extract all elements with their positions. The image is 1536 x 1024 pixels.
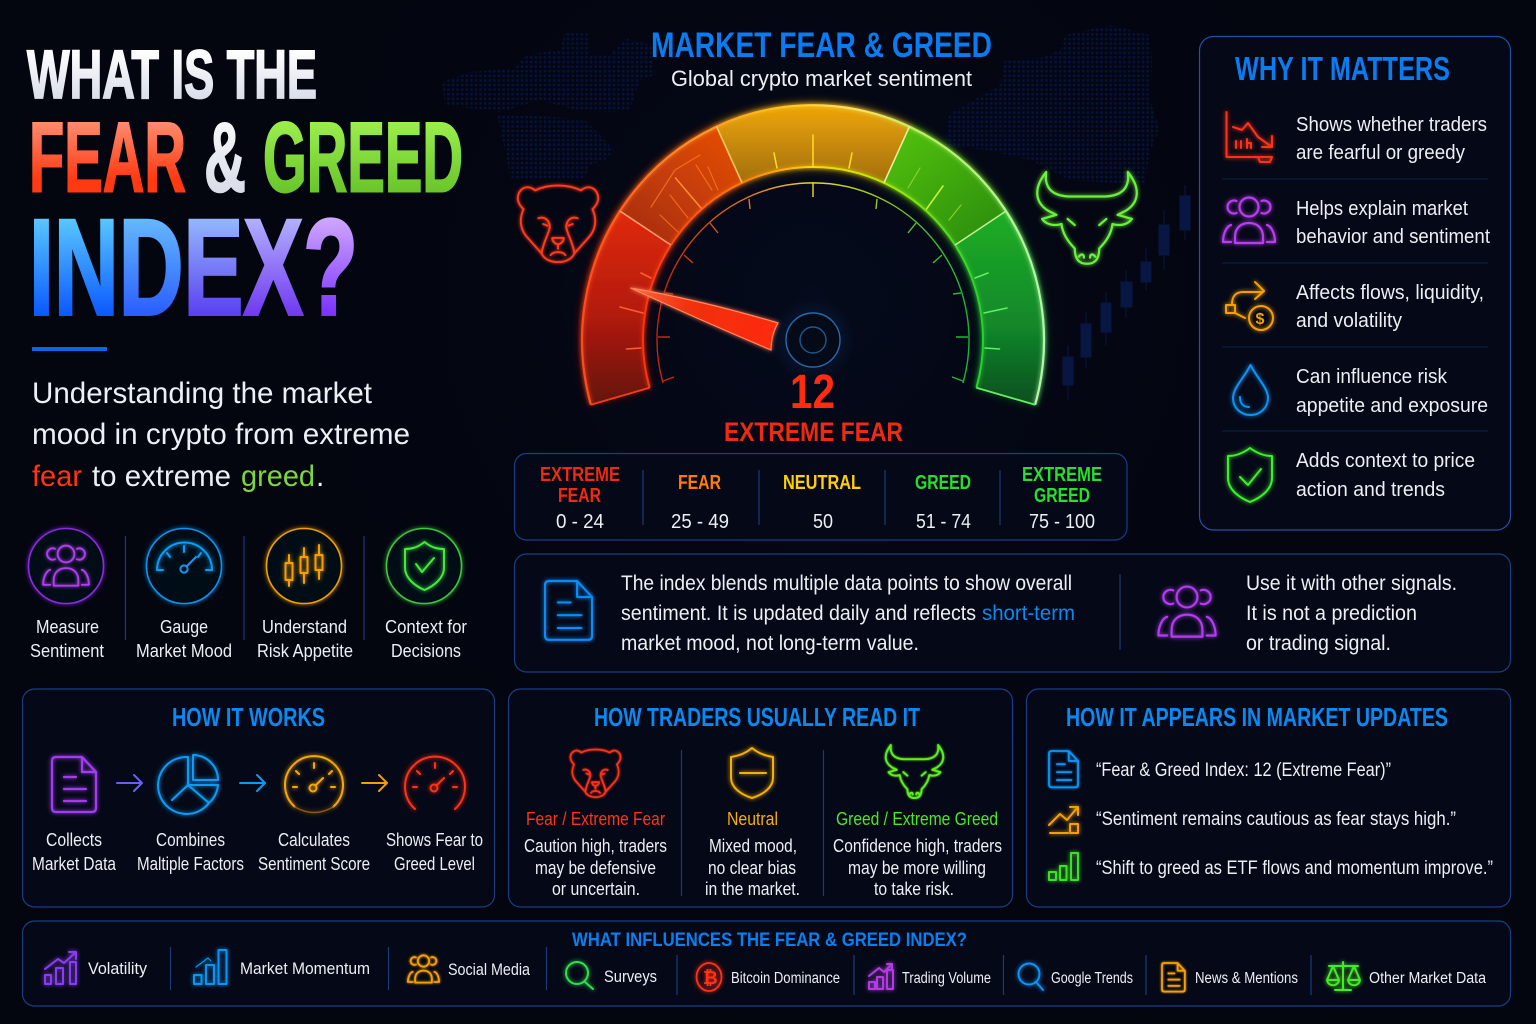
panel: explanation: market mood, not long-term value.: [621, 632, 919, 655]
panel: influences: Market Momentum: [240, 959, 370, 978]
panel: explanation: [514, 554, 1510, 672]
panel: explanation: It is not a prediction: [1246, 602, 1417, 625]
arrow: step one: [117, 775, 142, 791]
panel: influences: Bitcoin Dominance: [731, 970, 840, 987]
panel: sentiment ranges: GREED: [915, 472, 971, 494]
icon: google trends: [1018, 964, 1043, 990]
panel: how it works: Sentiment Score: [258, 853, 370, 874]
panel: influences: Google Trends: [1051, 970, 1133, 987]
panel: how it works: [22, 689, 494, 907]
panel: how traders read it: may be more willing: [848, 858, 986, 878]
icon: bull: [1037, 172, 1137, 264]
icon: document: [52, 757, 96, 812]
feature: measure sentiment: Measure: [36, 616, 99, 637]
feature: measure sentiment: [28, 528, 104, 661]
panel: influences: WHAT INFLUENCES THE FEAR & GREED INDEX?: [572, 930, 967, 951]
icon: people: [1223, 198, 1275, 243]
panel: how traders read it: may be defensive: [535, 858, 656, 878]
subtitle: Understanding the market: [32, 377, 373, 410]
panel: sentiment ranges: 50: [813, 511, 833, 533]
panel: explanation: The index blends multiple data points to show overall: [621, 572, 1072, 595]
feature: context for decisions: Decisions: [391, 640, 461, 661]
world map dot background: [442, 25, 1160, 185]
icon: news: [1162, 963, 1185, 992]
central heading: [651, 26, 992, 91]
icon: doc small: [1049, 751, 1078, 787]
panel: how traders read it: Greed / Extreme Greed: [836, 809, 998, 829]
panel: market updates: “Fear & Greed Index: 12 (Extreme Fear)”: [1096, 760, 1391, 781]
arrow: step three: [362, 775, 387, 791]
title: &: [204, 102, 246, 212]
panel: sentiment ranges: 0 - 24: [556, 511, 604, 533]
panel: sentiment ranges: [514, 454, 1127, 540]
candlestick background: [1063, 185, 1190, 400]
panel: why it matters: Shows whether traders: [1296, 113, 1487, 136]
feature: understand risk appetite: [257, 528, 353, 661]
icon: bitcoin: [696, 963, 722, 991]
panel: influences: Trading Volume: [902, 970, 991, 987]
panel: influences: Volatility: [88, 959, 147, 978]
icon: rising chart: [1049, 807, 1078, 833]
title: FEAR: [29, 102, 186, 212]
panel: sentiment ranges: EXTREME: [1022, 464, 1102, 486]
icon: social media: [408, 955, 439, 983]
panel: how it works: Calculates: [278, 829, 350, 850]
title accent rule: [32, 347, 107, 351]
panel: how it works: Shows Fear to: [386, 829, 483, 850]
panel: sentiment ranges: 25 - 49: [671, 511, 729, 533]
panel: how traders read it: no clear bias: [708, 858, 796, 878]
icon: water drop: [1233, 365, 1268, 415]
icon: bull small: [886, 745, 943, 798]
subtitle: mood in crypto from extreme: [32, 418, 410, 451]
title: WHAT IS THE: [27, 36, 317, 113]
icon: bitcoin: ₿: [703, 968, 718, 989]
icon: scales: [1327, 962, 1360, 990]
panel: why it matters: action and trends: [1296, 478, 1445, 501]
feature: measure sentiment: Sentiment: [30, 640, 104, 661]
panel: why it matters: Helps explain market: [1296, 197, 1468, 220]
gauge value: [724, 366, 903, 447]
panel: influences: [22, 921, 1510, 1006]
subtitle: to extreme: [92, 460, 231, 493]
panel: how traders read it: [508, 689, 1012, 907]
subtitle: fear: [32, 460, 82, 493]
icon: bear: [518, 185, 598, 262]
panel: how traders read it: HOW TRADERS USUALLY READ IT: [594, 702, 920, 732]
panel: influences: Other Market Data: [1369, 970, 1486, 987]
panel: why it matters: [1200, 36, 1510, 530]
panel: how traders read it: in the market.: [705, 879, 800, 899]
panel: influences: Social Media: [448, 960, 530, 979]
icon: falling chart: [1226, 112, 1272, 162]
panel: why it matters: Can influence risk: [1296, 365, 1448, 388]
subtitle: .: [316, 460, 324, 493]
panel: why it matters: WHY IT MATTERS: [1235, 50, 1450, 87]
icon: bear small: [570, 750, 621, 797]
panel: explanation: or trading signal.: [1246, 632, 1391, 655]
feature: context for decisions: [385, 528, 467, 661]
panel: influences: News & Mentions: [1195, 970, 1298, 987]
panel: how traders read it: Caution high, traders: [524, 836, 667, 856]
panel: how it works: Collects: [46, 829, 102, 850]
panel: explanation: short-term: [982, 602, 1075, 625]
panel: how traders read it: to take risk.: [874, 879, 954, 899]
panel: sentiment ranges: EXTREME: [540, 464, 620, 486]
icon: volatility: [45, 952, 76, 984]
feature: gauge market mood: [136, 528, 232, 661]
panel: why it matters: behavior and sentiment: [1296, 225, 1490, 248]
panel: how it works: Greed Level: [394, 853, 475, 874]
icon: pie chart: [158, 755, 218, 814]
feature: gauge market mood: Gauge: [160, 616, 208, 637]
panel: sentiment ranges: FEAR: [678, 472, 721, 494]
panel: explanation: Use it with other signals.: [1246, 572, 1457, 595]
panel: how it works: Combines: [156, 829, 225, 850]
panel: how traders read it: Mixed mood,: [709, 836, 797, 856]
title: [27, 36, 463, 344]
panel: market updates: [1026, 689, 1510, 907]
panel: how traders read it: or uncertain.: [552, 879, 640, 899]
gauge value: 12: [790, 366, 835, 419]
gauge: [582, 105, 1044, 405]
title: GREED: [263, 102, 463, 212]
icon: money flow: [1226, 282, 1273, 330]
feature: understand risk appetite: Understand: [262, 616, 347, 637]
panel: sentiment ranges: FEAR: [558, 485, 601, 507]
panel: why it matters: appetite and exposure: [1296, 394, 1488, 417]
panel: why it matters: and volatility: [1296, 309, 1403, 332]
panel: how it works: HOW IT WORKS: [172, 702, 325, 732]
central heading: MARKET FEAR & GREED: [651, 26, 992, 65]
title: INDEX?: [29, 192, 358, 344]
gauge value: EXTREME FEAR: [724, 417, 903, 447]
icon: trading volume: [869, 964, 893, 989]
icon: momentum: [194, 950, 226, 984]
icon: red gauge: [405, 757, 465, 809]
feature: understand risk appetite: Risk Appetite: [257, 640, 353, 661]
icon: shield check: [1228, 448, 1272, 502]
feature: gauge market mood: Market Mood: [136, 640, 232, 661]
subtitle: greed: [241, 460, 315, 493]
feature: context for decisions: Context for: [385, 616, 467, 637]
panel: sentiment ranges: 75 - 100: [1029, 511, 1095, 533]
panel: explanation: sentiment. It is updated daily and reflects: [621, 602, 976, 625]
panel: market updates: “Sentiment remains cautious as fear stays high.”: [1096, 809, 1456, 830]
panel: why it matters: Affects flows, liquidity,: [1296, 281, 1484, 304]
panel: sentiment ranges: GREED: [1034, 485, 1090, 507]
panel: how it works: Market Data: [32, 853, 117, 874]
icon: orange gauge: [285, 756, 343, 812]
subtitle: [32, 377, 410, 493]
icon: neutral shield: [731, 748, 773, 798]
icon: surveys: [566, 962, 593, 989]
panel: how traders read it: Fear / Extreme Fear: [526, 809, 665, 829]
panel: how traders read it: Confidence high, traders: [833, 836, 1002, 856]
panel: sentiment ranges: 51 - 74: [916, 511, 971, 533]
panel: why it matters: Adds context to price: [1296, 449, 1475, 472]
arrow: step two: [240, 775, 265, 791]
panel: influences: Surveys: [604, 967, 657, 986]
panel: sentiment ranges: NEUTRAL: [783, 472, 861, 494]
panel: how traders read it: Neutral: [727, 809, 778, 829]
panel: why it matters: are fearful or greedy: [1296, 141, 1466, 164]
panel: why it matters: $: [1256, 311, 1264, 328]
panel: how it works: Maltiple Factors: [137, 853, 244, 874]
central heading: Global crypto market sentiment: [671, 66, 972, 91]
icon: green bars: [1049, 853, 1078, 880]
